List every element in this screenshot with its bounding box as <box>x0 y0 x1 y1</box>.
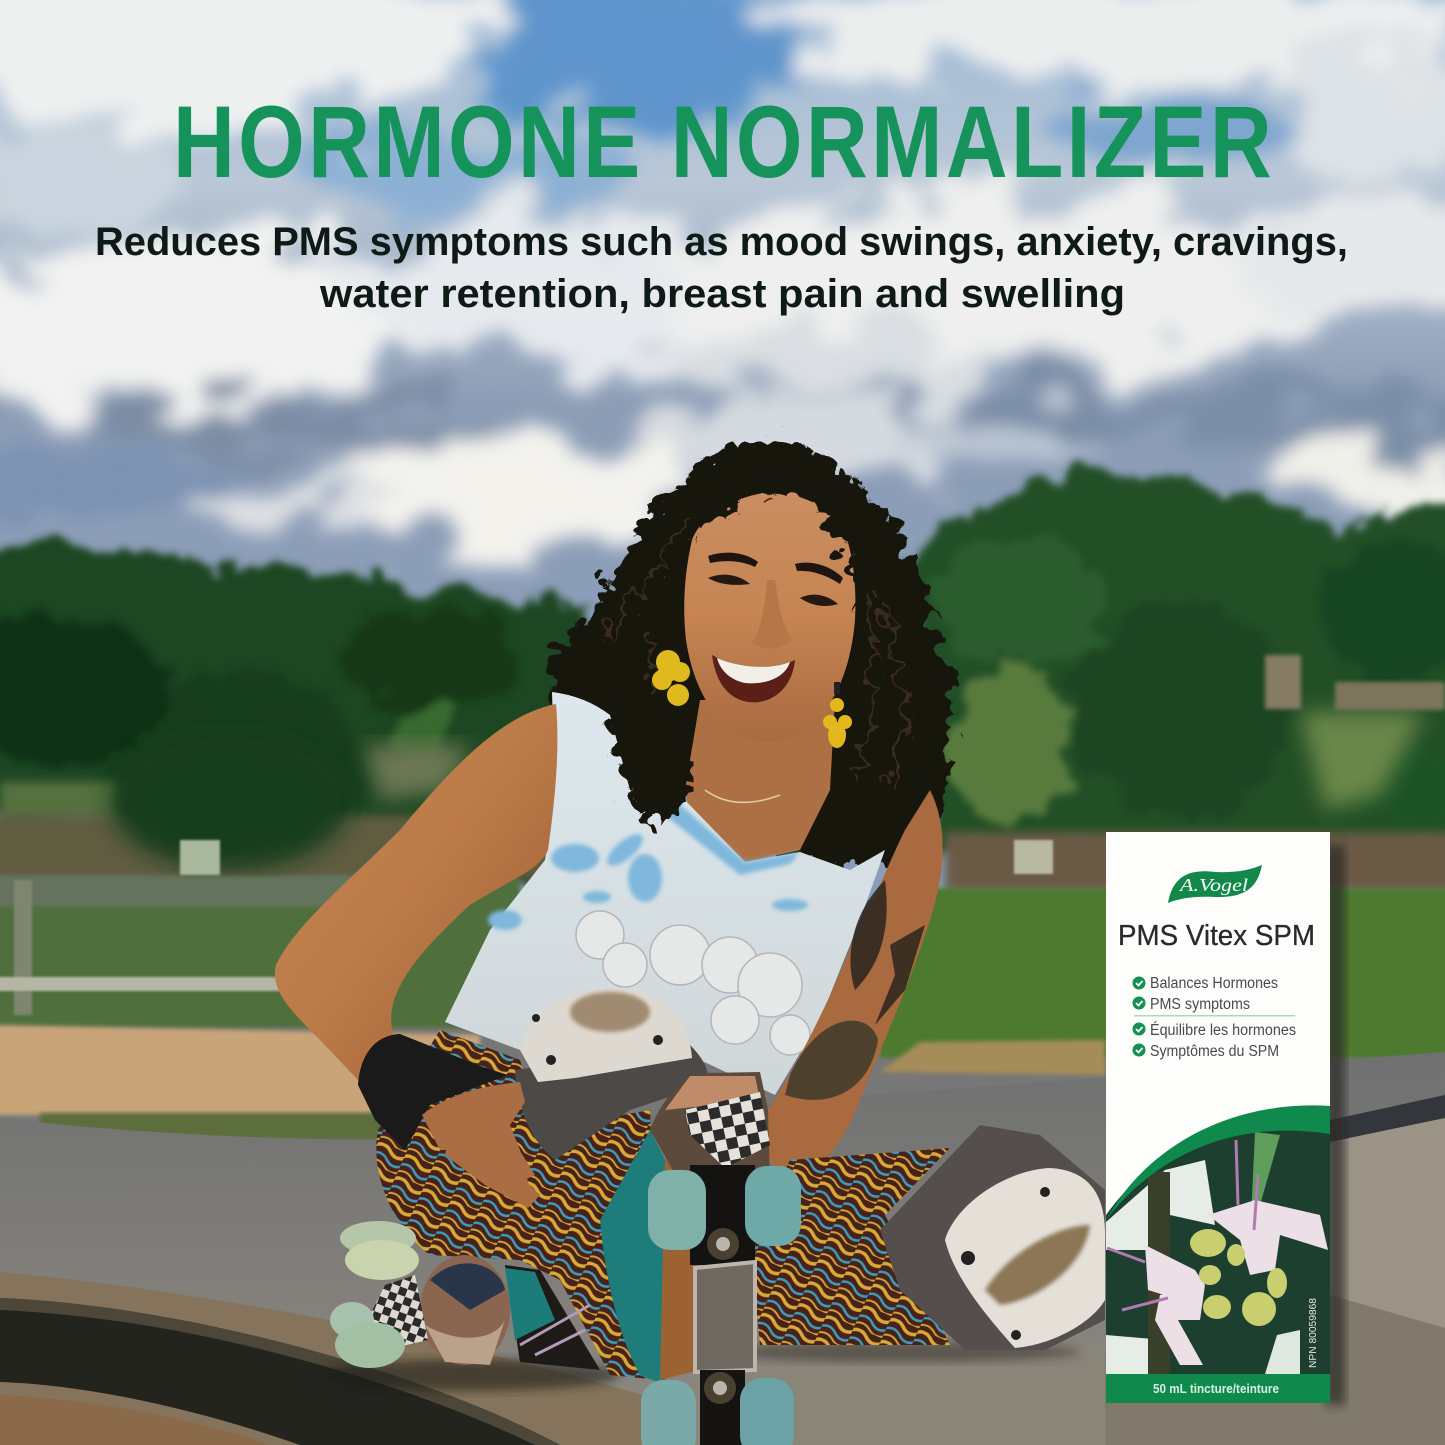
knee pad: left <box>515 988 708 1160</box>
pants <box>376 1030 660 1380</box>
face <box>684 491 855 742</box>
hand <box>422 1082 540 1208</box>
subtitle: Reduces PMS symptoms such as mood swings, anxiety, cravings, <box>95 220 1348 264</box>
box bullet list: Symptômes du SPM <box>1150 1043 1279 1060</box>
background: skate park pavement <box>0 1052 1445 1445</box>
neck and chest <box>685 700 835 862</box>
box NPN number: NPN 80059868 <box>1307 1298 1319 1368</box>
box photo: vitex flowers <box>1106 1123 1330 1374</box>
hair back <box>541 432 946 863</box>
earring: dangle <box>823 682 852 748</box>
box bullet list: Équilibre les hormones <box>1150 1022 1296 1039</box>
front hair lock over shirt <box>600 686 685 820</box>
person: woman in roller skates <box>275 432 1105 1445</box>
shirt tie-dye patches <box>488 800 808 930</box>
product box shadow <box>1325 845 1345 1405</box>
hair curl highlights <box>600 510 896 780</box>
necklace <box>705 790 780 802</box>
earring: flower <box>652 650 690 706</box>
title: HORMONE NORMALIZER <box>173 85 1272 199</box>
arm: right with tattoos <box>755 790 943 1190</box>
box bullet list <box>1132 975 1296 1060</box>
facial features <box>708 553 843 702</box>
subtitle <box>95 220 1348 316</box>
background: cloudy sky <box>0 0 1445 900</box>
hair over forehead <box>685 470 854 610</box>
box logo: A.Vogel leaf: A.Vogel <box>1179 875 1248 895</box>
background: field, fence and sand <box>0 730 1445 1140</box>
subtitle: water retention, breast pain and swelling <box>319 272 1125 316</box>
skate: side <box>330 1221 600 1370</box>
skate: front <box>600 1072 801 1445</box>
shirt cloud drawing <box>576 911 810 1055</box>
background: tree line <box>0 468 1445 880</box>
knee pad: right <box>880 1125 1105 1350</box>
box footer band <box>1106 1374 1330 1403</box>
box footer band: 50 mL tincture/teinture <box>1153 1382 1279 1396</box>
wrist band <box>358 1034 508 1150</box>
box bullet list: PMS symptoms <box>1150 996 1250 1013</box>
shirt <box>445 692 885 1095</box>
product box: PMS Vitex SPM <box>1106 832 1330 1403</box>
box green swoosh <box>1106 1105 1330 1220</box>
arm: left <box>275 704 557 1080</box>
box product name: PMS Vitex SPM <box>1118 920 1315 952</box>
box logo: A.Vogel leaf <box>1168 865 1262 903</box>
box bullet list: Balances Hormones <box>1150 975 1278 992</box>
